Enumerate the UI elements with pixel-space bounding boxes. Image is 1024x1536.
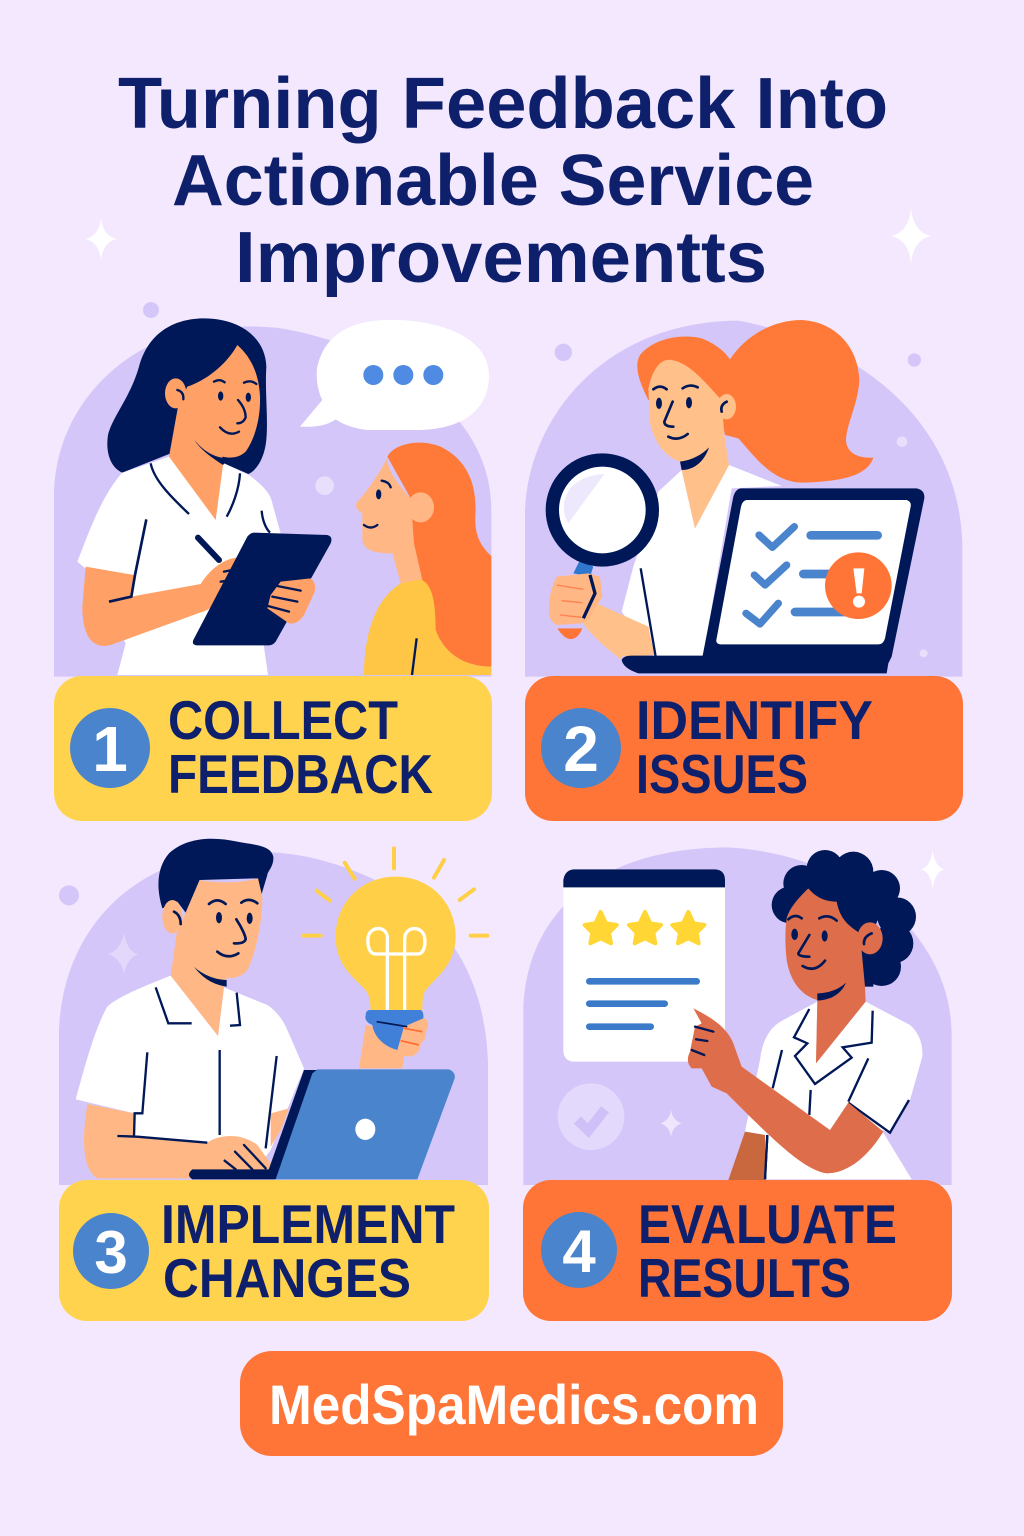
icon: laptop with checklist: [622, 488, 924, 673]
arch background 2: [525, 321, 962, 677]
person: woman with ponytail: [582, 320, 873, 660]
label bar: collect feedback: 1: [92, 713, 128, 785]
title: Actionable Service: [172, 141, 814, 221]
label bar: evaluate results: 4: [562, 1218, 596, 1285]
label bar: implement changes: CHANGES: [163, 1247, 411, 1309]
illustration 1: [54, 302, 491, 677]
arch background 3: [59, 852, 488, 1185]
label bar: evaluate results: RESULTS: [638, 1247, 851, 1309]
arch background 1: [54, 326, 491, 677]
illustration 4: [523, 847, 952, 1185]
panel: implement changes: [59, 839, 489, 1321]
illustration 2: [525, 320, 962, 677]
panel: evaluate results: [523, 847, 952, 1321]
panel: identify issues: [525, 320, 963, 821]
label bar: collect feedback: FEEDBACK: [168, 743, 433, 805]
icon: check badge: [558, 1083, 624, 1150]
icon: magnifying glass: [549, 460, 652, 639]
label bar: evaluate results: EVALUATE: [638, 1193, 897, 1255]
label bar: collect feedback: [54, 676, 492, 821]
icon: blue laptop: [189, 1069, 455, 1179]
label bar: implement changes: IMPLEMENT: [161, 1193, 455, 1255]
icon: light bulb: [303, 848, 487, 1068]
label bar: identify issues: ISSUES: [636, 743, 808, 805]
label bar: implement changes: [59, 1180, 489, 1321]
label bar: identify issues: [525, 676, 963, 821]
panel: collect feedback: [54, 302, 492, 821]
arch background 4: [523, 847, 952, 1185]
person: woman with curly hair: [688, 850, 922, 1180]
person: woman with orange hair: [356, 443, 491, 675]
person: man at laptop: [76, 839, 304, 1178]
speech bubble: [300, 320, 489, 430]
person: woman with tablet: [77, 318, 331, 675]
label bar: identify issues: IDENTIFY: [636, 689, 873, 751]
label bar: evaluate results: [523, 1180, 952, 1321]
label bar: identify issues: 2: [563, 713, 599, 785]
website button: MedSpaMedics.com: [269, 1373, 759, 1436]
title: [118, 64, 888, 298]
title: Improvementts: [235, 218, 767, 298]
review card: [563, 869, 725, 1062]
title: Turning Feedback Into: [118, 64, 888, 144]
label bar: collect feedback: COLLECT: [168, 689, 398, 751]
label bar: implement changes: 3: [94, 1219, 128, 1286]
icon: sparkles near title: [85, 208, 931, 264]
website button: [240, 1351, 783, 1456]
illustration 3: [59, 839, 488, 1185]
